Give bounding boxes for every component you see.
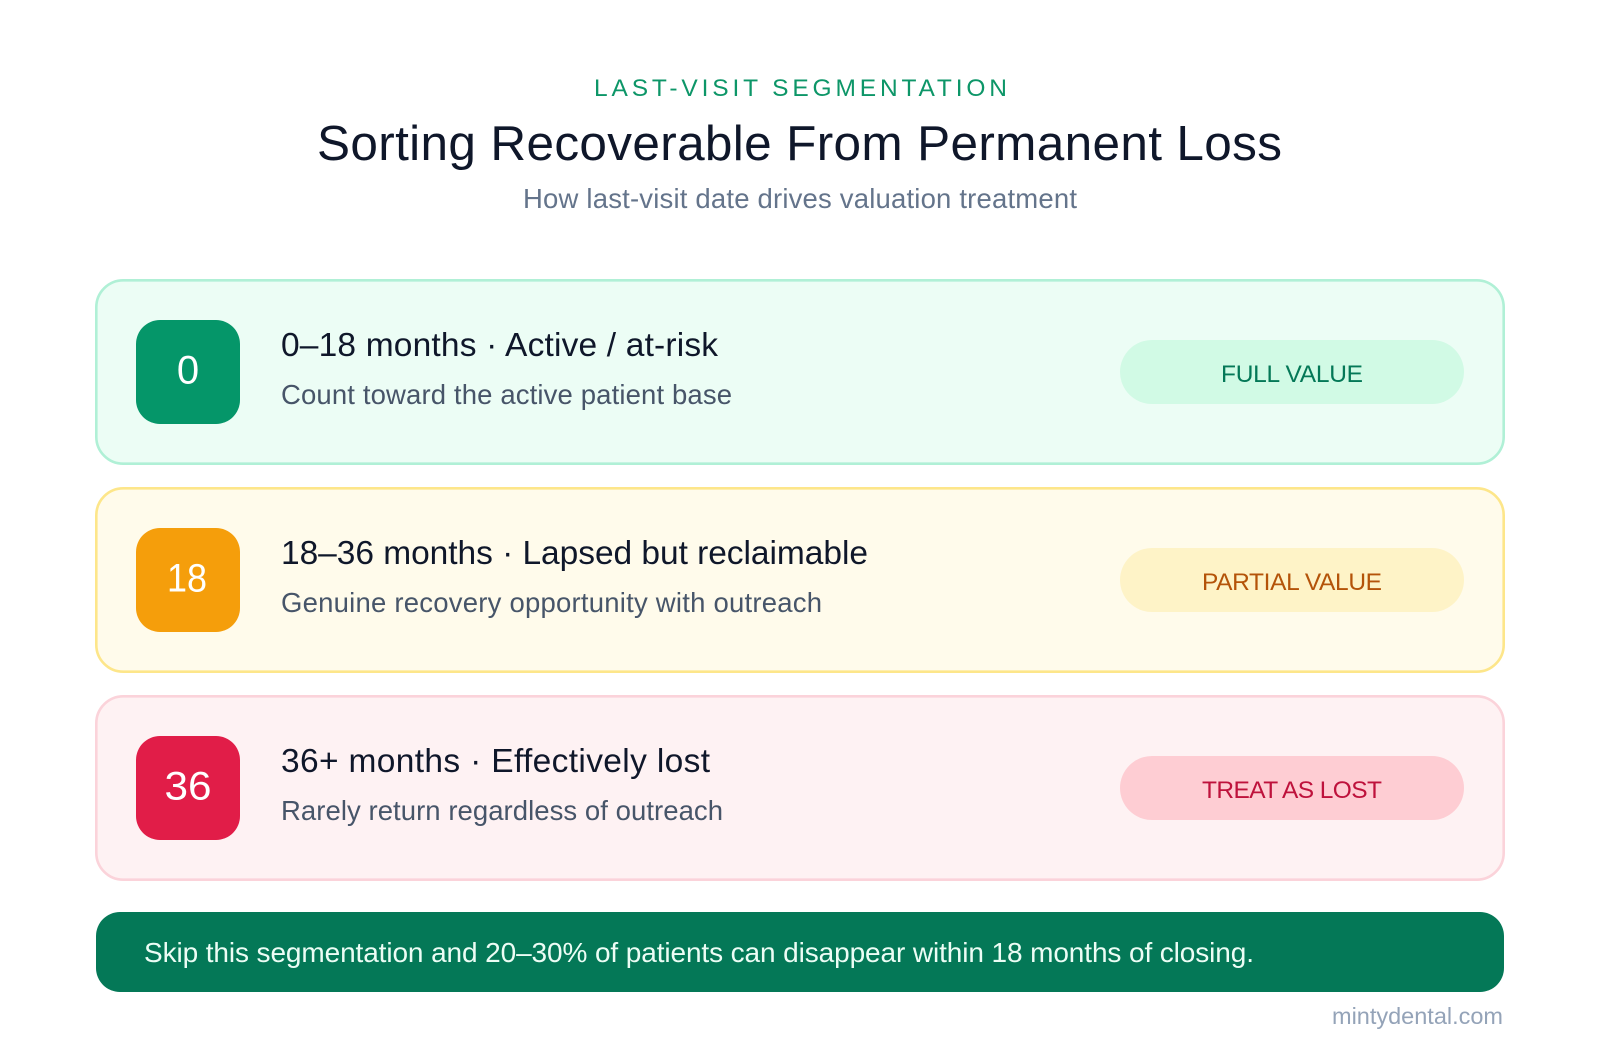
icon: badge 36: 36 bbox=[164, 764, 212, 808]
subtitle: How last-visit date drives valuation treatment bbox=[523, 183, 1077, 214]
pill: partial value bbox=[1120, 548, 1464, 612]
panel: 36+ months bbox=[96, 696, 1504, 880]
icon: badge 18: 18 bbox=[167, 556, 207, 600]
header bbox=[317, 75, 1282, 214]
callout banner: Skip this segmentation and 20–30% of patients can disappear within 18 months of closing. bbox=[144, 937, 1254, 968]
footer source: mintydental.com bbox=[1332, 1003, 1503, 1029]
pill: partial value: PARTIAL VALUE bbox=[1202, 569, 1382, 596]
callout banner bbox=[96, 912, 1504, 992]
panel: 0-18 months bbox=[96, 280, 1504, 464]
row description: Genuine recovery opportunity with outreach bbox=[281, 587, 822, 618]
icon: badge 36 bbox=[136, 736, 240, 840]
pill: full value: FULL VALUE bbox=[1221, 361, 1363, 388]
row title: 36+ months · Effectively lost bbox=[281, 743, 711, 780]
pill: treat as lost: TREAT AS LOST bbox=[1202, 777, 1382, 804]
icon: badge 0: 0 bbox=[177, 348, 199, 392]
icon: badge 0 bbox=[136, 320, 240, 424]
eyebrow: LAST-VISIT SEGMENTATION bbox=[594, 75, 1007, 102]
row description: Count toward the active patient base bbox=[281, 379, 732, 410]
icon: badge 18 bbox=[136, 528, 240, 632]
title: Sorting Recoverable From Permanent Loss bbox=[317, 116, 1282, 171]
pill: full value bbox=[1120, 340, 1464, 404]
panel: 18-36 months bbox=[96, 488, 1504, 672]
row description: Rarely return regardless of outreach bbox=[281, 795, 723, 826]
row title: 0–18 months · Active / at-risk bbox=[281, 327, 718, 364]
row title: 18–36 months · Lapsed but reclaimable bbox=[281, 535, 868, 572]
pill: treat as lost bbox=[1120, 756, 1464, 820]
